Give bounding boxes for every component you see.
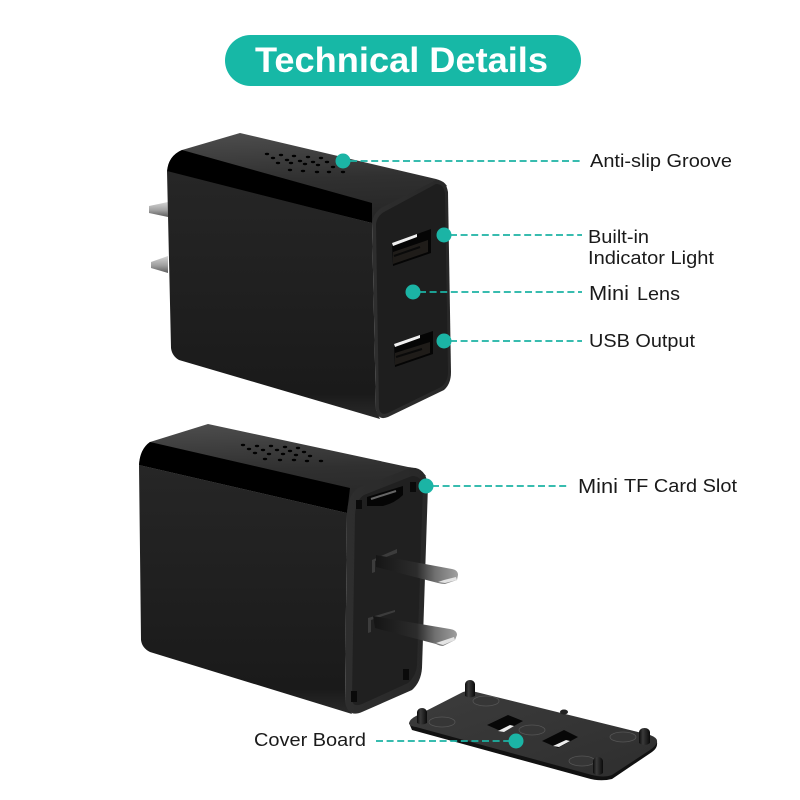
callout: Mini Lens: [406, 283, 680, 305]
callout: Mini Lens: Mini: [589, 283, 629, 305]
icon: anti-slip groove holes: [265, 153, 345, 173]
callout: Anti-slip Groove: [336, 151, 732, 171]
callout: Built-in Indicator Light: Indicator Light: [588, 248, 714, 268]
callout: Built-in Indicator Light: [436, 227, 714, 268]
end face inner panel: [352, 476, 423, 705]
icon: rear pins: [149, 202, 168, 273]
black glossy band: [167, 150, 372, 223]
small back nub: [560, 710, 568, 714]
end face with USB ports: [372, 180, 451, 418]
title: [225, 35, 581, 86]
callout: Built-in Indicator Light: Built-in: [588, 227, 649, 247]
icon: USB port bottom: [394, 331, 433, 367]
board plate: [409, 691, 657, 776]
callout: Mini TF Card Slot: Mini: [578, 476, 618, 498]
icon: groove holes: [241, 444, 323, 462]
black glossy band: [139, 442, 350, 513]
circular pads: [429, 696, 636, 766]
title: Technical Details: [255, 41, 548, 80]
callout: Mini TF Card Slot: [418, 476, 737, 498]
USB cut-outs: [487, 715, 578, 748]
top face: [167, 133, 447, 224]
small feet: [351, 669, 409, 702]
callout: Cover Board: [254, 730, 524, 750]
end face inner panel: [376, 184, 448, 414]
icon: TF card slot: [356, 482, 416, 509]
callout: USB Output: [436, 331, 695, 351]
icon: USB port top: [392, 229, 431, 266]
side face: [139, 465, 352, 714]
callout: Cover Board: Cover Board: [254, 730, 366, 750]
icon: top pin: [372, 549, 458, 584]
device: charger rear view: [139, 424, 458, 714]
end face with pins: [345, 468, 428, 714]
device: cover board: [409, 680, 657, 780]
side face: [167, 171, 380, 419]
board plate underside: [409, 723, 657, 780]
callout: Mini TF Card Slot: TF Card Slot: [624, 476, 737, 496]
callout: Mini Lens: Lens: [637, 284, 680, 304]
callout: Anti-slip Groove: Anti-slip Groove: [590, 151, 732, 171]
posts: [417, 680, 650, 775]
callout: USB Output: USB Output: [589, 331, 695, 351]
device: charger front view: [149, 133, 451, 419]
top face: [139, 424, 426, 513]
icon: bottom pin: [368, 610, 457, 646]
